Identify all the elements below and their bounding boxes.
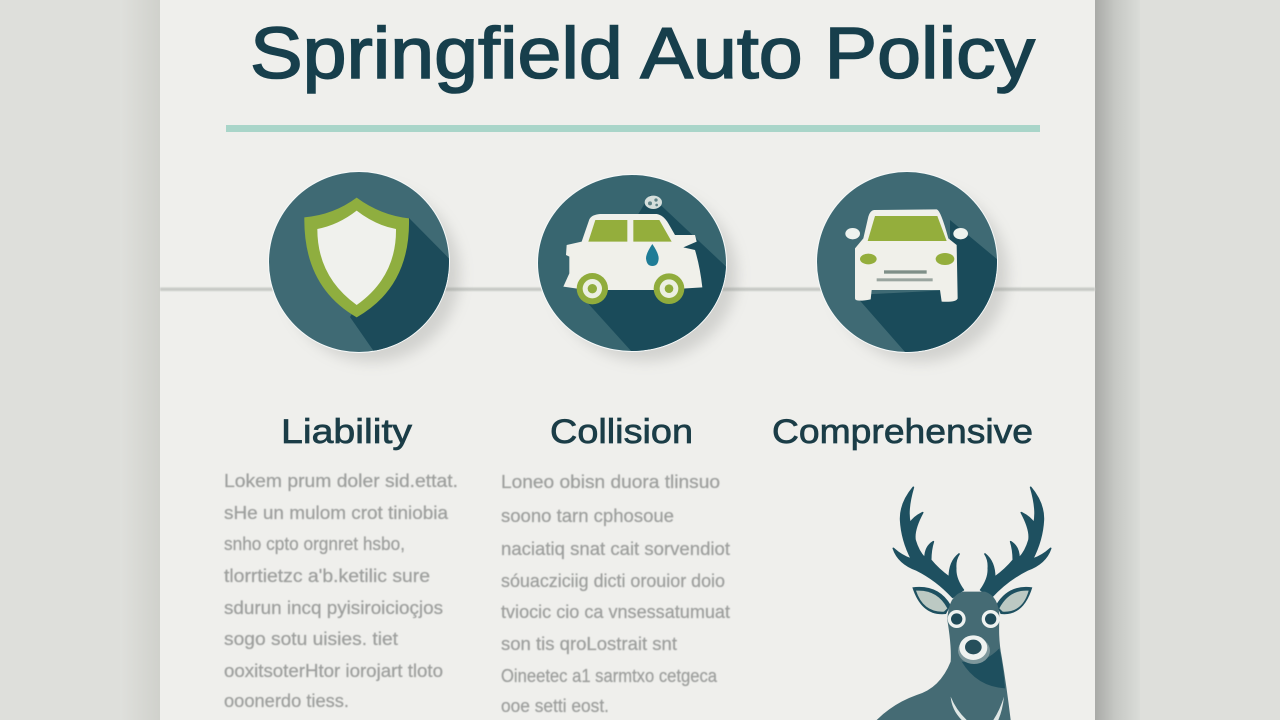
title rule <box>226 125 1040 132</box>
text block: liability <box>224 471 458 711</box>
illustration: deer <box>877 487 1051 720</box>
text block: liability: ooonerdo tiess. <box>224 691 349 711</box>
heading: Liability: Liability <box>281 413 412 451</box>
eyes <box>948 610 1000 628</box>
muzzle <box>958 635 990 664</box>
text block: liability: tlorrtietzc a'b.ketilic sure <box>224 566 430 586</box>
text block: collision: sóuacziciig dicti orouior doio <box>501 571 725 591</box>
chest marks <box>951 697 1004 720</box>
text block: liability: sogo sotu uisies. tiet <box>224 629 398 649</box>
text block: collision: Oineetec a1 sarmtxo cetgeca <box>501 666 718 686</box>
icon: comprehensive car <box>816 171 1010 362</box>
heading: Collision: Collision <box>550 413 693 451</box>
chest patch <box>962 648 1005 688</box>
icon: liability shield <box>268 171 464 366</box>
text block: liability: sdurun incq pyisiroicioçjos <box>224 598 443 618</box>
text block: collision: ooe setti eost. <box>501 696 609 716</box>
paper panel <box>160 0 1095 720</box>
text block: collision <box>501 472 730 716</box>
body and head <box>877 592 1011 720</box>
text block: liability: Lokem prum doler sid.ettat. <box>224 471 458 491</box>
title: Springfield Auto Policy <box>250 14 1035 94</box>
text block: collision: soono tarn cphosoue <box>501 506 674 526</box>
text block: collision: naciatiq snat cait sorvendiot <box>501 539 730 559</box>
ears <box>912 587 1032 614</box>
small debris <box>645 196 662 209</box>
car body <box>563 214 702 290</box>
left antler <box>893 487 963 597</box>
text block: collision: son tis qroLostrait snt <box>501 634 677 654</box>
windows <box>588 220 672 242</box>
text block: collision: Loneo obisn duora tlinsuo <box>501 472 720 492</box>
wheels <box>577 273 608 304</box>
text block: liability: ooxitsoterHtor iorojart tloto <box>224 661 443 681</box>
text block: collision: tviocic cio ca vnsessatumuat <box>501 602 730 622</box>
water drop <box>646 244 659 266</box>
right antler <box>981 487 1051 597</box>
text block: liability: sHe un mulom crot tiniobia <box>224 503 449 523</box>
heading: Comprehensive: Comprehensive <box>772 413 1033 451</box>
text block: liability: snho cpto orgnret hsbo, <box>224 534 405 554</box>
icon: collision car <box>537 174 737 370</box>
